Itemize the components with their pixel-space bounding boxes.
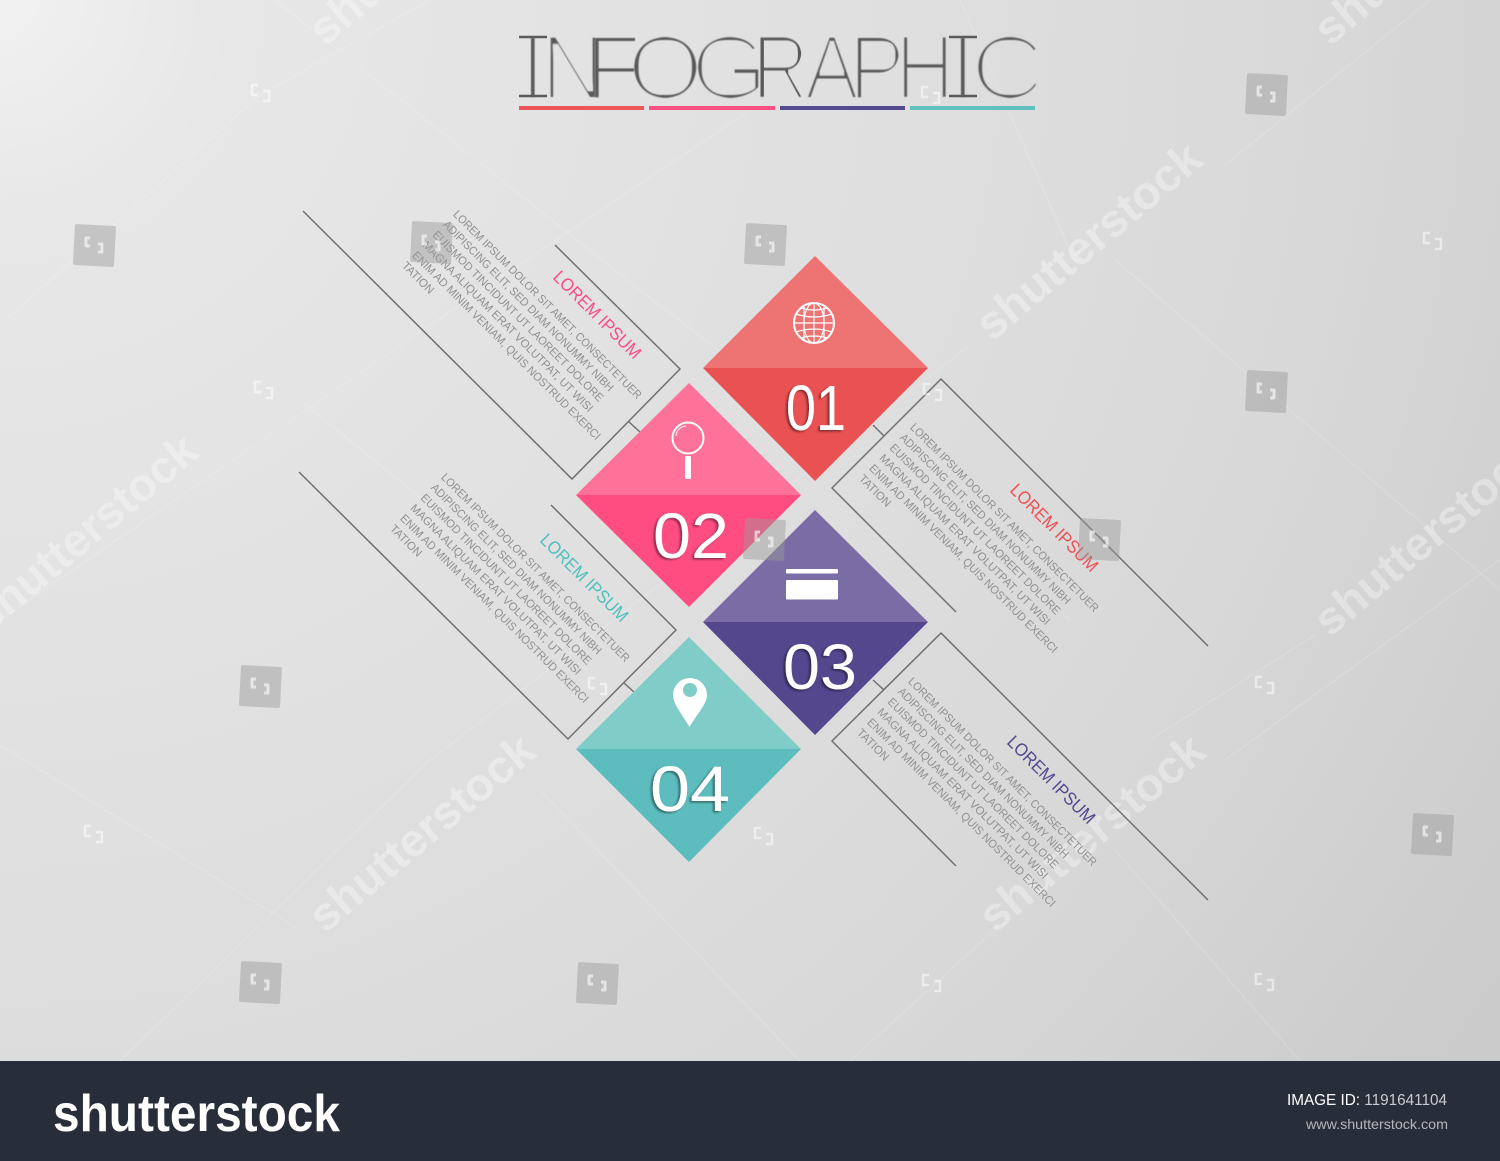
panel: 03 text, lower right: ADIPISCING ELIT, SED DIAM NONUMMY NIBH xyxy=(895,686,1070,861)
diamond 03 xyxy=(703,510,928,735)
title: A xyxy=(804,17,859,119)
number 01: 01 xyxy=(786,372,846,444)
watermark text: shutterstock xyxy=(298,723,545,942)
panel: 01 text, upper right: ENIM AD MINIM VENIAM, QUIS NOSTRUD EXERCI xyxy=(866,463,1059,656)
title: R xyxy=(752,16,809,119)
panel: 02 text, top left: TATION xyxy=(399,260,436,297)
title: F xyxy=(585,17,641,119)
watermark text: shutterstock xyxy=(965,131,1212,350)
diamond 01 xyxy=(703,256,928,481)
diamond 04 xyxy=(576,637,801,862)
panel: 01 text, upper right: TATION xyxy=(856,473,893,510)
panel: 01 text, upper right: LOREM IPSUM DOLOR SIT AMET, CONSECTETUER xyxy=(907,422,1100,615)
watermark swirls xyxy=(86,87,1440,990)
number 04: 04 xyxy=(650,753,730,825)
panel: 04 text, lower left: ADIPISCING ELIT, SED DIAM NONUMMY NIBH xyxy=(428,482,603,657)
title: C xyxy=(970,16,1045,119)
footer url: www.shutterstock.com xyxy=(1305,1116,1448,1132)
title xyxy=(519,16,1045,119)
number 03: 03 xyxy=(783,631,857,703)
panel: 03 text, lower right: TATION xyxy=(854,727,891,764)
panel: 04 text, lower left: MAGNA ALIQUAM ERAT VOLUTPAT, UT WISI xyxy=(408,502,583,678)
icon: magnifier xyxy=(672,422,704,479)
title: I xyxy=(950,17,976,119)
diamond 02 xyxy=(576,383,801,607)
panel: 02 text, top left: ENIM AD MINIM VENIAM, QUIS NOSTRUD EXERCI xyxy=(409,250,602,443)
footer logo: shutterstock xyxy=(53,1085,340,1143)
watermark squares xyxy=(73,73,1454,1005)
panel: 01 text, upper right: LOREM IPSUM xyxy=(1006,480,1102,576)
panel: 04 text, lower left: LOREM IPSUM xyxy=(536,530,632,626)
title: P xyxy=(848,16,906,119)
panel: 04 text, lower left: LOREM IPSUM DOLOR SIT AMET, CONSECTETUER xyxy=(438,472,631,665)
panel: 02 text, top left xyxy=(303,209,680,479)
panel: 02 text, top left: MAGNA ALIQUAM ERAT VOLUTPAT, UT WISI xyxy=(420,239,595,415)
panel: 03 text, lower right: EUISMOD TINCIDUNT UT LAOREET DOLORE xyxy=(885,696,1060,872)
panel: 01 text, upper right: ADIPISCING ELIT, SED DIAM NONUMMY NIBH xyxy=(897,432,1072,607)
title: N xyxy=(541,16,605,119)
panel: 02 text, top left: ADIPISCING ELIT, SED DIAM NONUMMY NIBH xyxy=(440,219,615,394)
panel: 04 text, lower left: TATION xyxy=(387,523,424,560)
panel: 03 text, lower right: MAGNA ALIQUAM ERAT VOLUTPAT, UT WISI xyxy=(875,706,1050,882)
icon: globe xyxy=(794,303,834,343)
image id: IMAGE ID: 1191641104 xyxy=(1287,1092,1447,1109)
panel: 03 text, lower right: LOREM IPSUM xyxy=(1003,732,1099,828)
title: G xyxy=(690,16,769,119)
title: O xyxy=(627,17,704,119)
panel: 04 text, lower left xyxy=(299,472,676,739)
panel: 03 text, lower right xyxy=(832,633,1208,920)
title: I xyxy=(520,17,546,119)
panel: 03 text, lower right: ENIM AD MINIM VENIAM, QUIS NOSTRUD EXERCI xyxy=(864,717,1057,910)
panel: 03 text, lower right: LOREM IPSUM DOLOR SIT AMET, CONSECTETUER xyxy=(905,676,1098,869)
icon: card xyxy=(786,569,838,600)
icon: map pin xyxy=(673,678,707,727)
title colour underlines xyxy=(519,106,1035,110)
watermark text: shutterstock xyxy=(968,723,1215,942)
panel: 02 text, top left: LOREM IPSUM DOLOR SIT AMET, CONSECTETUER xyxy=(450,209,643,402)
panel: 04 text, lower left: ENIM AD MINIM VENIAM, QUIS NOSTRUD EXERCI xyxy=(397,513,590,706)
panel: 01 text, upper right: EUISMOD TINCIDUNT UT LAOREET DOLORE xyxy=(887,442,1062,618)
panel: 01 text, upper right xyxy=(832,379,1208,666)
panel: 04 text, lower left: EUISMOD TINCIDUNT UT LAOREET DOLORE xyxy=(418,492,593,668)
panel: 02 text, top left: LOREM IPSUM xyxy=(549,267,645,363)
panel: 02 text, top left: EUISMOD TINCIDUNT UT LAOREET DOLORE xyxy=(430,229,605,405)
title: H xyxy=(895,16,955,119)
panel: 01 text, upper right: MAGNA ALIQUAM ERAT VOLUTPAT, UT WISI xyxy=(877,452,1052,628)
number 02: 02 xyxy=(653,500,729,572)
footer bar xyxy=(0,1061,1500,1161)
